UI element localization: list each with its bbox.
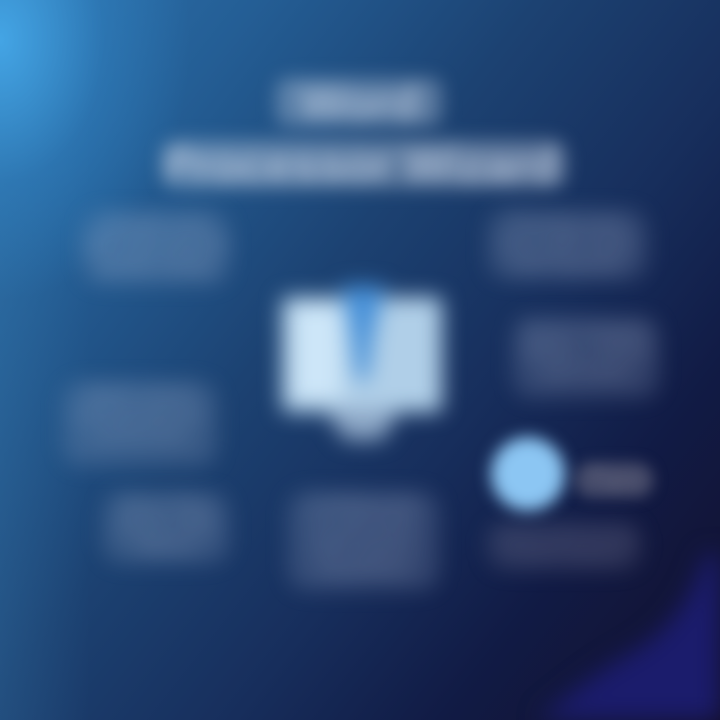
text block: left middle: Spell check — [85, 382, 195, 404]
label beside circle — [574, 462, 654, 498]
text block: top right: text with style — [501, 233, 634, 255]
text block: right middle — [513, 318, 659, 398]
icon: blue circle — [491, 437, 565, 511]
title — [152, 68, 576, 198]
caption below circle — [488, 523, 640, 569]
text block: top left: Create and — [104, 212, 208, 234]
text block: bottom centre: Collaborate — [308, 492, 419, 514]
text block: bottom left: share with — [117, 515, 215, 537]
text block: right middle: tables, charts — [522, 340, 650, 362]
text block: bottom centre: anywhere — [317, 558, 410, 580]
text block: right middle: Insert images — [522, 318, 650, 340]
text block: top right: and layouts — [512, 255, 623, 277]
icon: open book — [266, 272, 458, 455]
text block: bottom centre — [288, 492, 439, 590]
title text: Processor Wizard — [162, 138, 558, 191]
text block: left middle: and grammar — [77, 404, 203, 426]
text block: left middle — [63, 382, 217, 466]
text block: top left: edit documents — [83, 234, 229, 256]
text block: top right — [488, 211, 647, 279]
caption below circle: work faster — [511, 545, 617, 567]
text block: bottom left: others — [135, 537, 197, 559]
text block: left middle: correction — [91, 426, 189, 448]
title text — [155, 76, 564, 191]
text block: bottom centre: in real time — [311, 514, 416, 536]
title backing: first line — [276, 78, 442, 126]
title backing: second line — [164, 140, 566, 188]
text block: bottom left: Save files — [120, 493, 212, 515]
text block: top right: Format your — [509, 211, 626, 233]
label beside circle: Tips — [588, 463, 640, 493]
text block: top left: easily today — [99, 256, 213, 278]
text block: right middle: and more — [541, 362, 631, 384]
text block: bottom left — [103, 493, 229, 563]
text block: bottom centre: with teams — [312, 536, 415, 558]
caption below circle: Learn shortcuts — [488, 523, 640, 545]
title text: Word — [300, 76, 420, 129]
text block: top left — [83, 212, 229, 284]
